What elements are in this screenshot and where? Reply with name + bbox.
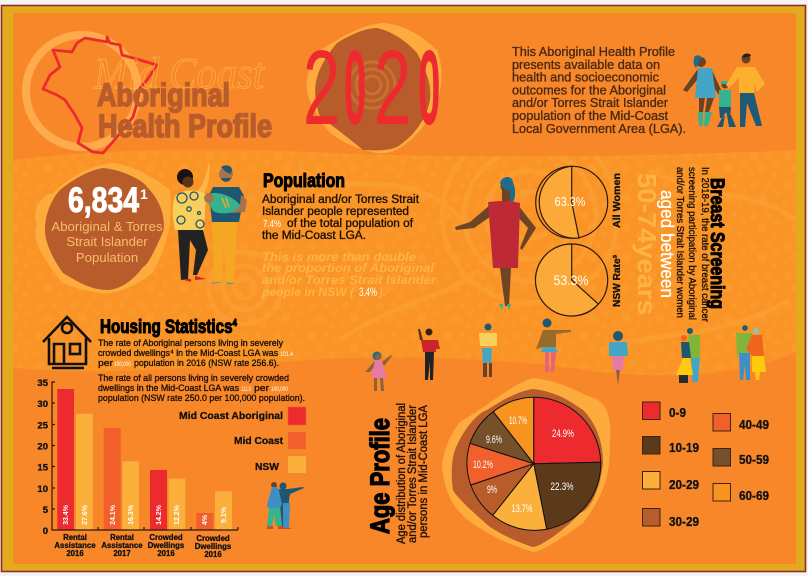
lighter patterned band <box>13 150 796 376</box>
housing heading: Housing Statistics <box>100 317 266 338</box>
x axis labels: Rental <box>63 533 87 542</box>
bar value labels: 16.3% <box>128 504 135 525</box>
y axis labels: 20 <box>37 442 48 452</box>
pie chart: age distribution: 9% <box>487 484 497 496</box>
axes <box>52 382 238 530</box>
y axis labels <box>37 378 49 537</box>
bar value labels: 14.2% <box>156 504 163 525</box>
population comparison callout: and/or Torres Strait Islander <box>262 275 437 287</box>
year text: 0 <box>344 27 366 146</box>
housing text <box>98 338 305 404</box>
icon: family illustration <box>683 54 765 127</box>
pie chart: All Women: 63.3% <box>554 194 586 209</box>
housing text: crowded dwellings⁴ in the Mid-Coast LGA was <box>98 348 278 359</box>
pie chart: age distribution: 13.7% <box>512 503 533 515</box>
housing text: population in 2016 (NSW rate 256.6). <box>134 358 279 369</box>
icon: woman in red dress <box>455 177 536 310</box>
housing text: per <box>98 358 113 369</box>
bar value labels: 9.1% <box>221 506 228 523</box>
age profile text: and/or Torres Strait Islander <box>407 405 419 543</box>
pie chart: All Women <box>536 166 608 238</box>
person: man in red <box>418 328 440 380</box>
y axis labels: 0 <box>43 526 48 537</box>
y axis labels: 15 <box>37 462 49 474</box>
population number: 6,834 <box>68 181 139 220</box>
label: All Women: All Women <box>612 173 623 228</box>
badge rings <box>349 62 395 108</box>
housing text: The rate of all persons living in severely crowded <box>98 373 289 384</box>
legend: housing chart: NSW <box>255 461 279 473</box>
intro text: Local Government Area (LGA). <box>512 122 686 136</box>
age profile text: Age distribution of Aboriginal <box>396 403 408 544</box>
pie chart: age distribution: 9.6% <box>486 434 502 446</box>
legend: age groups: 60-69 <box>739 488 769 503</box>
x axis labels: 2016 <box>66 549 84 558</box>
y axis labels: 5 <box>43 505 49 516</box>
breast screening text: and/or Torres Strait Islander women <box>674 167 686 318</box>
age profile text: persons in Mid-Coast LGA <box>418 405 430 538</box>
person: woman pointing <box>536 318 571 372</box>
person: man in yellow <box>479 324 497 377</box>
population blob <box>35 163 171 293</box>
bar value labels <box>63 504 228 525</box>
highlight: 50-74 years: 50-74years <box>632 173 662 315</box>
legend: age groups: 10-19 <box>669 440 699 455</box>
x axis labels: Rental <box>110 533 134 542</box>
population text <box>262 194 420 242</box>
population text: Islander people represented <box>262 206 409 218</box>
bar chart: housing statistics <box>37 378 238 559</box>
population blob: Strait Islander <box>66 234 148 249</box>
person: girl in pink <box>365 352 392 391</box>
housing text: population (NSW rate 250.0 per 100,000 population). <box>98 393 305 404</box>
intro text: health and socioeconomic <box>512 70 659 84</box>
breast screening text: screening participation by Aboriginal <box>686 167 698 320</box>
breast screening heading: Breast Screening <box>706 178 727 309</box>
age blob <box>442 378 610 552</box>
icon: house <box>43 317 91 368</box>
legend: housing chart: Mid Coast <box>234 435 283 447</box>
legend: age groups: 50-59 <box>739 452 769 467</box>
intro text: This Aboriginal Health Profile <box>512 45 675 59</box>
x axis labels: Assistance <box>101 541 143 550</box>
population heading: Population <box>263 171 345 192</box>
pie chart: age distribution: 10.7% <box>509 415 527 427</box>
population footnote: 1 <box>140 186 148 202</box>
pie chart: NSW Rate <box>535 244 608 316</box>
age profile text <box>396 403 430 544</box>
people: couple with yellow skirt <box>676 328 700 383</box>
script heading Mid Coast: Mid Coast <box>93 49 266 98</box>
population blob: Population <box>76 250 138 265</box>
pie chart: NSW Rate: 53.3% <box>554 272 588 288</box>
pie chart: age distribution: 22.3% <box>550 481 574 493</box>
bar value labels: 24.1% <box>110 504 117 525</box>
title block: Mid Coast Aboriginal Health Profile <box>26 35 272 153</box>
breast screening text: In 2018-19, the rate of breast cancer <box>699 167 711 322</box>
intro text: outcomes for the Aboriginal <box>512 84 666 98</box>
y axis labels: 30 <box>37 399 48 410</box>
bars <box>57 389 232 530</box>
year text: 0 <box>418 27 440 146</box>
population comparison callout: the proportion of Aboriginal <box>262 263 435 275</box>
heading Health Profile: Health Profile <box>98 108 272 144</box>
legend: age groups <box>642 402 769 529</box>
year badge 2020 <box>303 23 441 153</box>
y axis labels: 35 <box>37 378 49 389</box>
housing text: 111.0 <box>241 387 251 393</box>
bar value labels: 4% <box>202 514 209 525</box>
intro text <box>512 45 686 136</box>
pie chart: age distribution <box>467 397 601 530</box>
bar value labels: 33.4% <box>63 504 70 525</box>
x axis labels: Crowded <box>196 534 230 543</box>
housing heading: 4 <box>233 318 237 329</box>
highlight: aged between: aged between <box>657 190 677 298</box>
population comparison callout: people in NSW ( <box>261 287 355 299</box>
population comparison callout: ). <box>377 287 386 299</box>
population caption: Aboriginal & Torres <box>51 219 163 234</box>
housing text: 100,000 <box>271 387 289 393</box>
legend: housing chart <box>179 407 306 473</box>
pale ring behind map <box>26 35 138 147</box>
population comparison callout: 3.4% <box>359 287 377 299</box>
intro text: presents available data on <box>512 58 660 72</box>
housing text: 101.4 <box>280 352 294 358</box>
icon: couple with baby <box>173 161 247 284</box>
legend: age groups: 30-29 <box>669 514 699 529</box>
row of people <box>365 318 766 391</box>
legend: age groups: 0-9 <box>669 405 686 420</box>
population text: of the total population of <box>287 218 414 230</box>
label: NSW Rate: NSW Rate³ <box>612 254 623 307</box>
breast screening text <box>674 167 711 322</box>
year text <box>303 27 440 147</box>
x axis labels: 2016 <box>204 550 222 559</box>
blob shape <box>35 163 171 293</box>
intro text: population of the Mid-Coast <box>512 109 669 123</box>
bar value labels: 27.6% <box>82 504 89 525</box>
x axis labels <box>54 533 232 559</box>
housing text: per <box>254 383 269 394</box>
y axis labels: 10 <box>37 484 48 495</box>
population text: 7.4% <box>263 218 281 230</box>
x axis labels: Crowded <box>149 533 183 542</box>
age profile heading: Age Profile <box>365 418 395 534</box>
pie chart: age distribution: 10.2% <box>473 459 493 471</box>
y axis labels: 25 <box>37 420 49 432</box>
intro text: and/or Torres Strait Islander <box>512 96 668 110</box>
badge blob <box>307 23 441 153</box>
year text: 2 <box>374 28 411 147</box>
icon: two people pointing <box>267 482 304 529</box>
housing text: dwellings in the Mid-Coast LGA was <box>98 383 239 394</box>
legend: age groups: 20-29 <box>669 477 699 492</box>
x axis labels: 2016 <box>157 549 175 558</box>
x axis labels: Dwellings <box>195 542 232 551</box>
legend: housing chart: Mid Coast Aboriginal <box>179 410 283 422</box>
legend: age groups: 40-49 <box>739 417 769 432</box>
heading Aboriginal: Aboriginal <box>97 77 230 113</box>
population text: Aboriginal and/or Torres Strait <box>262 194 420 206</box>
person: woman with teal top <box>609 331 628 385</box>
population text: the Mid-Coast LGA. <box>262 230 366 242</box>
housing text: 100,000 <box>114 362 132 368</box>
map outline of Mid-Coast LGA <box>43 37 157 153</box>
year text: 2 <box>303 28 340 147</box>
housing text: The rate of Aboriginal persons living in severely <box>98 338 283 349</box>
population comparison callout <box>261 252 437 299</box>
people: couple in green and orange <box>736 325 766 380</box>
x axis labels: Assistance <box>54 541 96 550</box>
x axis labels: Dwellings <box>148 541 185 550</box>
pie chart: age distribution: 24.9% <box>552 428 574 440</box>
population comparison callout: This is more than double <box>262 252 417 264</box>
x axis labels: 2017 <box>113 549 131 558</box>
bar value labels: 12.2% <box>174 504 181 525</box>
